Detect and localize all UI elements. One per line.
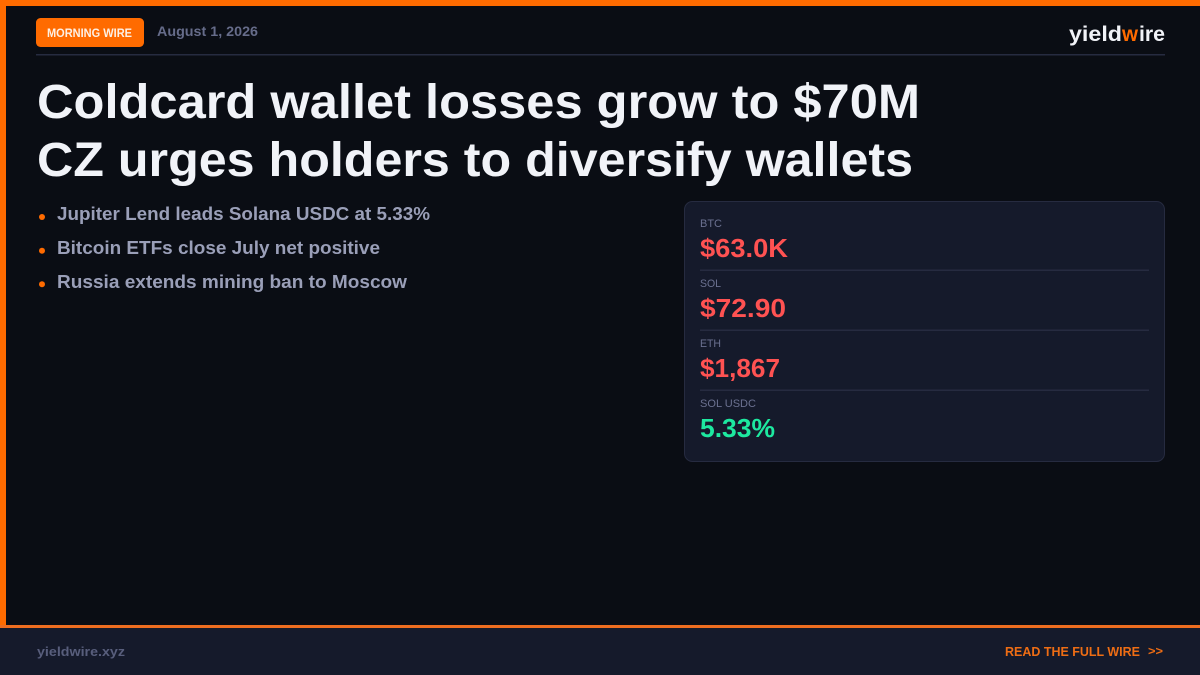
bullet: Bitcoin ETFs: Bitcoin ETFs close July net positive [57, 238, 380, 258]
header bar [36, 18, 1165, 47]
title [37, 76, 920, 187]
date: August 1, 2026 [157, 24, 259, 39]
stat: SOL: SOL [700, 278, 721, 290]
title: Coldcard wallet losses grow to $70M [37, 76, 920, 129]
logo: yieldwire: ire [1139, 23, 1165, 46]
stat: SOL: $72.90 [700, 293, 786, 323]
footer call to action: READ THE FULL WIRE [1005, 644, 1140, 659]
footer url: yieldwire.xyz [37, 644, 126, 659]
stat: BTC [700, 218, 788, 263]
bullet: Jupiter Lend: Jupiter Lend leads Solana USDC at 5.33% [57, 204, 430, 224]
logo: yieldwire: w [1121, 23, 1139, 46]
bullet: Russia: Russia extends mining ban to Moscow [57, 272, 408, 292]
stat: SOL USDC: SOL USDC [700, 398, 756, 410]
stat: ETH: ETH [700, 338, 721, 350]
stat: BTC: BTC [700, 218, 722, 230]
panel: market prices [684, 202, 1164, 462]
footer [0, 625, 1200, 675]
stat: BTC: $63.0K [700, 233, 788, 263]
badge: morning wire: MORNING WIRE [47, 28, 132, 40]
badge: morning wire [36, 18, 144, 47]
stat: SOL [700, 278, 786, 323]
title: CZ urges holders to diversify wallets [37, 134, 913, 187]
stat: SOL USDC [700, 398, 775, 443]
bullet list [39, 204, 430, 292]
footer call to action: >> [1148, 644, 1163, 658]
stat: SOL USDC: 5.33% [700, 413, 775, 443]
logo: yieldwire: yield [1069, 23, 1122, 46]
stat: ETH: $1,867 [700, 353, 780, 383]
logo: yieldwire [1069, 23, 1165, 46]
stat: ETH [700, 338, 780, 383]
